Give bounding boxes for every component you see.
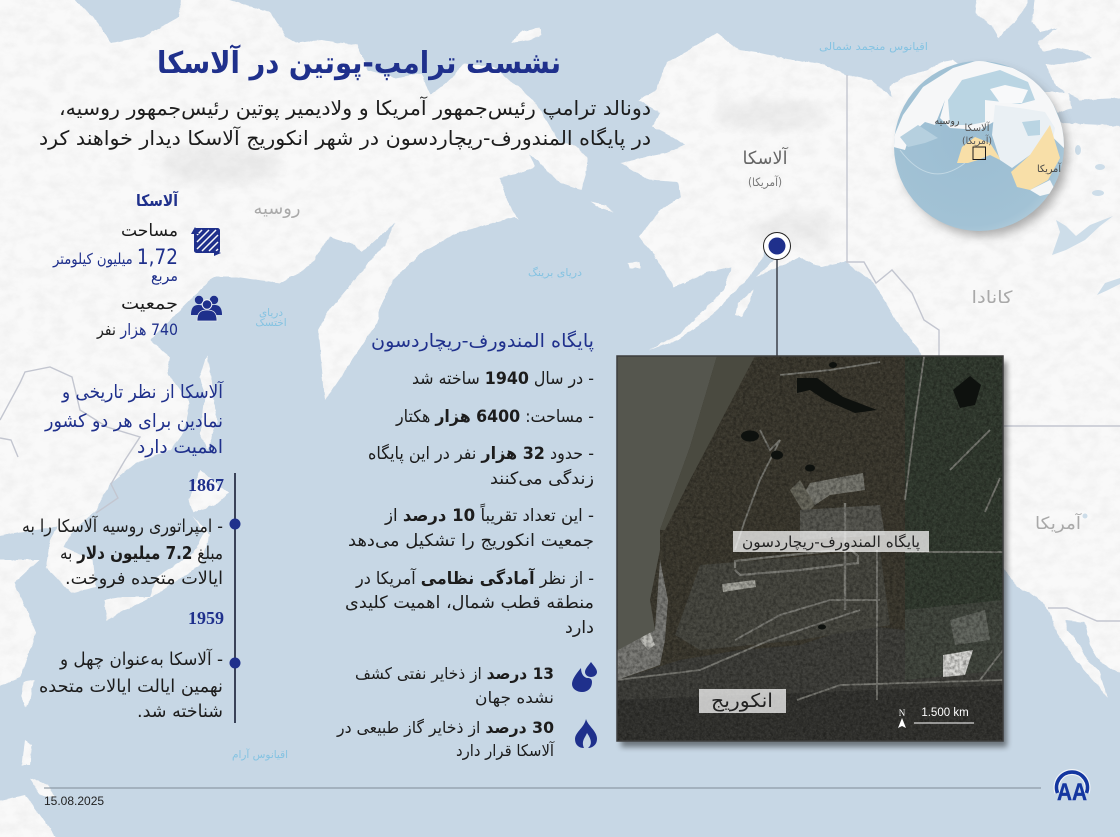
oil reserve text bbox=[355, 664, 554, 708]
lakes on image bbox=[741, 362, 981, 630]
label: anchorage bbox=[699, 689, 786, 713]
event 1867: - امپراتوری روسیه آلاسکا را به bbox=[22, 515, 223, 537]
panel: alaska facts bbox=[52, 190, 222, 340]
gas reserve text bbox=[336, 718, 555, 761]
event 1867: مبلغ 7.2 میلیون دلار به bbox=[60, 544, 223, 564]
event 1867 bbox=[22, 515, 223, 589]
logo: AA: AA bbox=[1057, 779, 1087, 806]
timeline bbox=[22, 473, 240, 723]
fact: military readiness bbox=[345, 567, 594, 638]
north arrow bbox=[898, 708, 906, 728]
year 1959: 1959 bbox=[188, 608, 224, 628]
scale bar: 1.500 km bbox=[921, 707, 969, 719]
label: usa: آمریکا bbox=[1035, 512, 1082, 534]
fact: share of population: جمعیت انکوریج را تشکیل می‌دهد bbox=[348, 531, 594, 551]
label: base: پایگاه المندورف-ریچاردسون bbox=[742, 533, 920, 552]
footer line bbox=[44, 787, 1041, 789]
area label: مساحت bbox=[121, 221, 178, 241]
oil reserve text: نشده جهان bbox=[475, 688, 554, 708]
event 1867: ایالات متحده فروخت. bbox=[65, 569, 223, 589]
heading: historic importance: اهمیت دارد bbox=[137, 437, 223, 458]
label: north pacific and seas: دریای bbox=[259, 307, 283, 319]
panel: base facts bbox=[345, 330, 594, 638]
oil reserve text: 13 درصد از ذخایر نفتی کشف bbox=[355, 664, 554, 684]
event 1959 bbox=[39, 648, 223, 722]
location pin bbox=[764, 232, 790, 260]
terrain shading bbox=[160, 100, 830, 250]
north arrow: N bbox=[899, 708, 906, 718]
label: russia: روسیه bbox=[254, 199, 300, 219]
date: 15.08.2025 bbox=[44, 794, 104, 808]
fact: military readiness: دارد bbox=[565, 618, 594, 638]
label: north pacific and seas: اقیانوس آرام bbox=[232, 748, 288, 761]
fact: residents: - حدود 32 هزار نفر در این پایگاه bbox=[368, 443, 594, 464]
event 1959: شناخته شد. bbox=[137, 702, 223, 722]
label: alaska on map: آلاسکا bbox=[742, 146, 788, 169]
label: north pacific and seas bbox=[232, 41, 928, 761]
locator globe: روسیه bbox=[934, 116, 960, 127]
subtitle: در پایگاه المندورف-ریچاردسون در شهر انکوریج آلاسکا دیدار خواهند کرد bbox=[39, 125, 651, 151]
icon: people bbox=[191, 296, 222, 321]
fact: share of population: - این تعداد تقریباً 10 درصد از bbox=[384, 502, 594, 526]
label: north pacific and seas: دریای برینگ bbox=[528, 266, 582, 279]
water bbox=[617, 356, 717, 650]
population label: جمعیت bbox=[121, 294, 178, 314]
satellite image panel bbox=[617, 350, 1007, 747]
heading: historic importance bbox=[44, 380, 224, 458]
event 1959: نهمین ایالت ایالات متحده bbox=[39, 677, 223, 697]
texture bbox=[617, 356, 1003, 741]
icon: area bbox=[191, 227, 221, 256]
gas reserve text: 30 درصد از ذخایر گاز طبیعی در bbox=[336, 718, 554, 738]
year 1867: 1867 bbox=[188, 475, 224, 495]
fact: built: - در سال 1940 ساخته شد bbox=[412, 369, 594, 389]
icon: oil drops bbox=[572, 662, 597, 692]
fact: military readiness: - از نظر آمادگی نظامی آمریکا در bbox=[355, 567, 594, 589]
area unit: مربع bbox=[151, 267, 178, 285]
fact: military readiness: منطقه قطب شمال، اهمیت کلیدی bbox=[345, 593, 594, 613]
locator globe bbox=[890, 60, 1068, 236]
lakes bbox=[1052, 145, 1120, 518]
locator globe: (آمریکا) bbox=[962, 134, 992, 147]
fact: residents bbox=[368, 443, 594, 489]
heading: historic importance: نمادین برای هر دو کشور bbox=[44, 411, 223, 432]
label: anchorage: انکوریج bbox=[711, 690, 773, 712]
locator globe: آمریکا bbox=[1037, 162, 1062, 175]
fact: residents: زندگی می‌کنند bbox=[490, 468, 594, 489]
population value: 740 هزار نفر bbox=[96, 320, 178, 340]
heading: base name: پایگاه المندورف-ریچاردسون bbox=[371, 330, 594, 352]
label: alaska on map: (آمریکا) bbox=[748, 175, 782, 190]
subtitle: دونالد ترامپ رئیس‌جمهور آمریکا و ولادیمیر پوتین رئیس‌جمهور روسیه، bbox=[59, 95, 651, 121]
label: north pacific and seas: اقیانوس منجمد شمالی bbox=[819, 41, 928, 53]
label: canada: کانادا bbox=[972, 288, 1014, 308]
gas reserve text: آلاسکا قرار دارد bbox=[456, 741, 555, 761]
heading: alaska: آلاسکا bbox=[136, 190, 178, 210]
subtitle bbox=[39, 95, 651, 151]
scale bar bbox=[914, 707, 974, 723]
fact: area: - مساحت: 6400 هزار هکتار bbox=[395, 407, 594, 427]
heading: historic importance: آلاسکا از نظر تاریخی و bbox=[61, 380, 224, 403]
label: alaska on map bbox=[742, 146, 788, 190]
area value: 1,72 میلیون کیلومتر bbox=[52, 245, 178, 269]
label: north pacific and seas: اختسک bbox=[255, 317, 287, 329]
roads bbox=[617, 350, 1003, 700]
title: نشست ترامپ-پوتین در آلاسکا bbox=[157, 44, 561, 81]
icon: gas flame bbox=[575, 719, 597, 748]
fact: share of population bbox=[348, 502, 594, 551]
leader line from pin to image bbox=[776, 260, 778, 356]
locator globe: آلاسکا bbox=[964, 121, 991, 134]
event 1959: - آلاسکا به‌عنوان چهل و bbox=[59, 648, 223, 670]
borders bbox=[0, 75, 1120, 621]
